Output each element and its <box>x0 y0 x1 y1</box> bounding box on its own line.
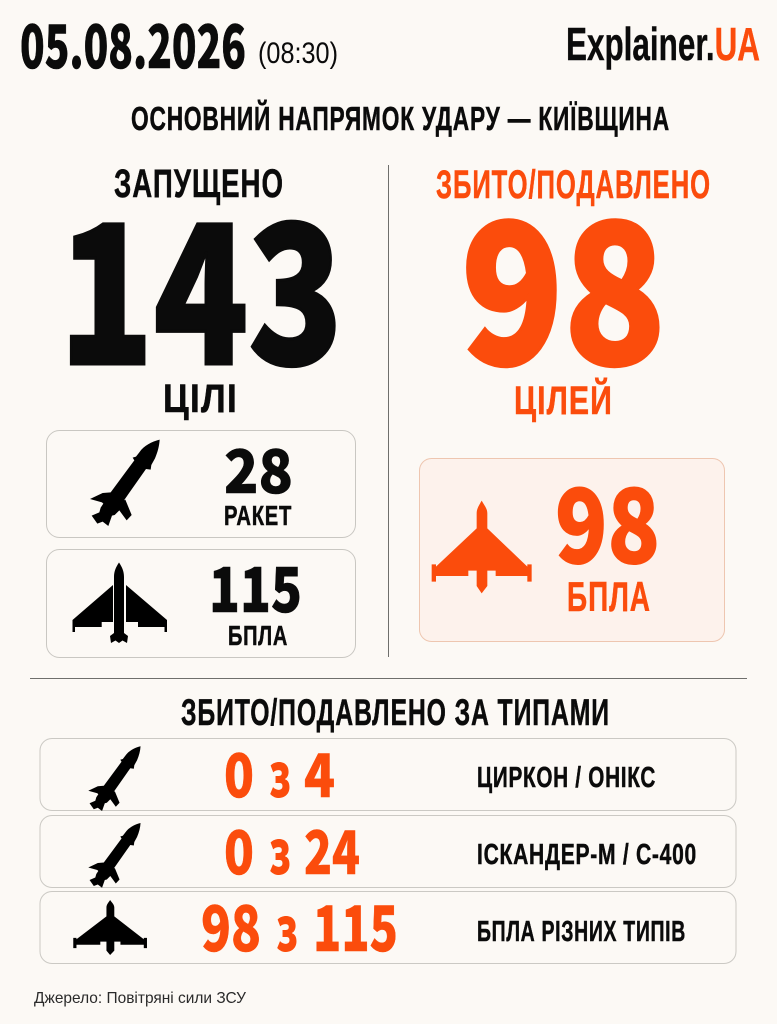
label: ЦИРКОН / ОНІКС <box>477 762 656 794</box>
value <box>224 805 360 892</box>
icon: rocket <box>88 823 141 888</box>
value: 0 <box>224 805 254 892</box>
launched total: 143 <box>59 140 343 420</box>
drones label: БПЛА <box>228 620 288 651</box>
icon: drone orange <box>432 501 532 593</box>
card: rockets <box>46 424 356 538</box>
value <box>224 728 335 815</box>
row: drones of various types <box>40 879 736 970</box>
row: Zircon / Onyx <box>40 728 736 815</box>
source: Джерело: Повітряні сили ЗСУ <box>34 990 247 1007</box>
value: з <box>276 882 298 969</box>
section divider <box>30 678 747 679</box>
launched unit: ЦІЛІ <box>163 377 238 421</box>
shot down total: 98 <box>461 139 666 421</box>
label: ІСКАНДЕР-М / С-400 <box>477 839 697 871</box>
icon: rocket <box>88 746 141 811</box>
time: (08:30) <box>258 37 338 70</box>
shot down drones count: 98 <box>555 444 660 593</box>
date: 05.08.2026 <box>20 0 246 86</box>
icon: drone <box>72 562 167 643</box>
value: 4 <box>304 728 335 815</box>
row: Iskander-M / S-400 <box>40 805 736 892</box>
column divider <box>388 165 389 657</box>
rockets label: РАКЕТ <box>224 500 292 531</box>
icon: rocket <box>90 440 160 526</box>
value: з <box>269 805 291 892</box>
value: з <box>269 728 291 815</box>
card: shot down drones <box>420 444 724 642</box>
shot down unit: ЦІЛЕЙ <box>514 377 613 423</box>
logo: Explainer.UA <box>566 18 760 70</box>
launched heading: ЗАПУЩЕНО <box>114 162 284 206</box>
value: 98 <box>201 879 261 970</box>
value: 115 <box>313 879 398 970</box>
value: 24 <box>304 805 360 892</box>
value: 0 <box>224 728 254 815</box>
panel: shot down <box>420 139 724 642</box>
rockets count: 28 <box>224 424 293 511</box>
shot down drones label: БПЛА <box>567 573 651 620</box>
card: drones <box>46 540 356 658</box>
panel: launched <box>46 140 356 658</box>
icon: drone <box>73 900 147 955</box>
value <box>201 879 398 970</box>
drones count: 115 <box>209 540 302 630</box>
